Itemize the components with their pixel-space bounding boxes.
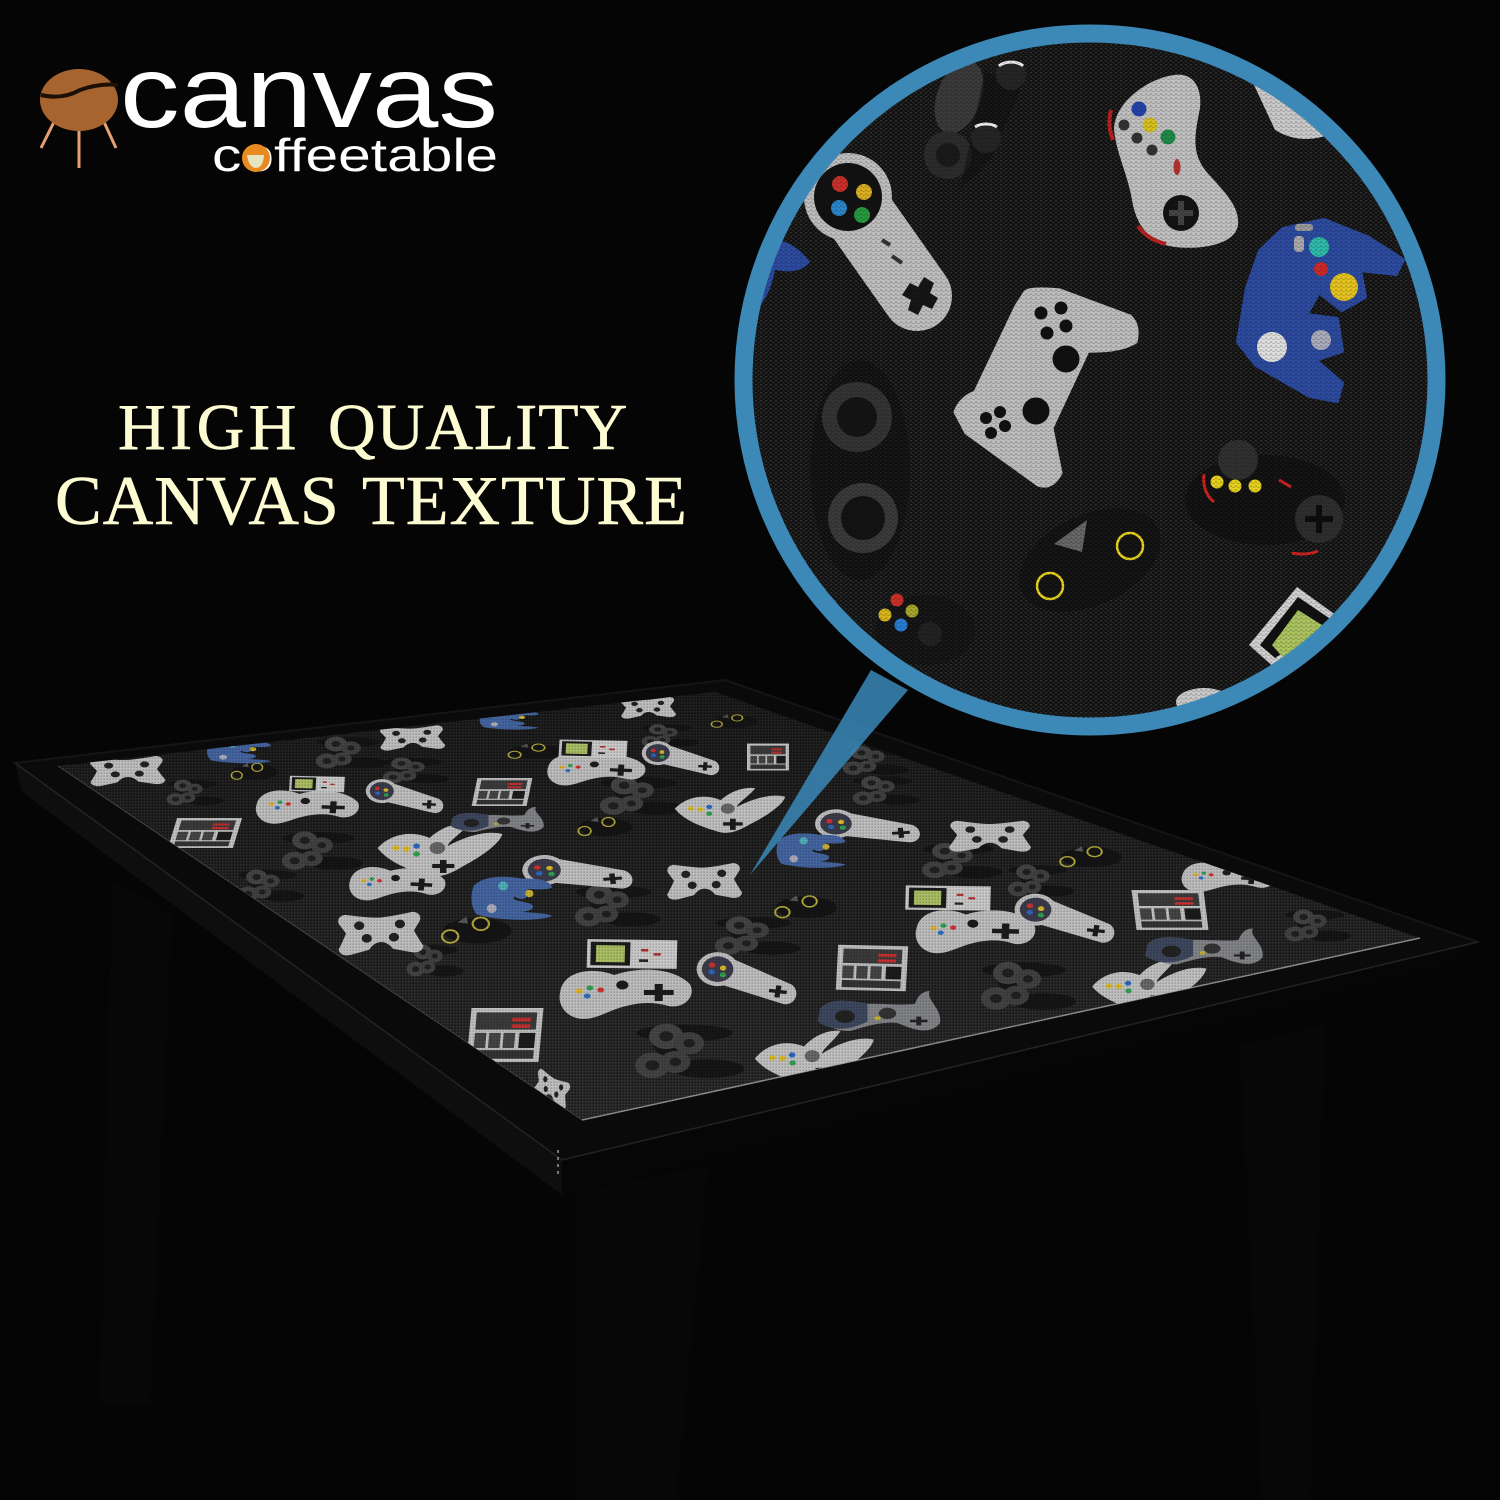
dark controller with yellow buttons [1185,440,1345,554]
circle border [744,34,1436,726]
partial white controller bottom [1176,688,1221,706]
title line 2: CANVAS [55,463,340,540]
logo icon: coffee cup [242,144,270,172]
title line 1: HIGH [118,391,301,464]
white PlayStation-style controller [955,289,1137,486]
logo wordmark: coffeetable: coffeetable [212,129,498,181]
logo wordmark: canvas: canvas [120,35,498,149]
title line 2: TEXTURE [362,463,688,540]
table legs [100,880,1325,1500]
table frame [15,680,1478,1196]
SNES controller [804,153,938,315]
title line 1: QUALITY [328,391,628,464]
table print: controllers [89,697,1351,1111]
white N64-style controller [1109,75,1238,248]
title [55,391,688,540]
Game Boy corner [1249,587,1334,665]
logo [40,35,498,181]
ghost dark controller, top [924,54,1026,190]
blue GameCube controller [1238,220,1403,401]
callout pointer [750,670,908,875]
colored buttons [875,594,975,665]
canvas table top [58,692,1420,1120]
partial white controller top right [1254,85,1328,139]
magnified canvas circle [744,34,1436,726]
ghost dark controller, left [810,360,910,580]
dark controller with yellow rings [1020,508,1160,612]
logo icon: coffee bean table [40,69,118,168]
partial blue controller left edge [760,239,810,305]
